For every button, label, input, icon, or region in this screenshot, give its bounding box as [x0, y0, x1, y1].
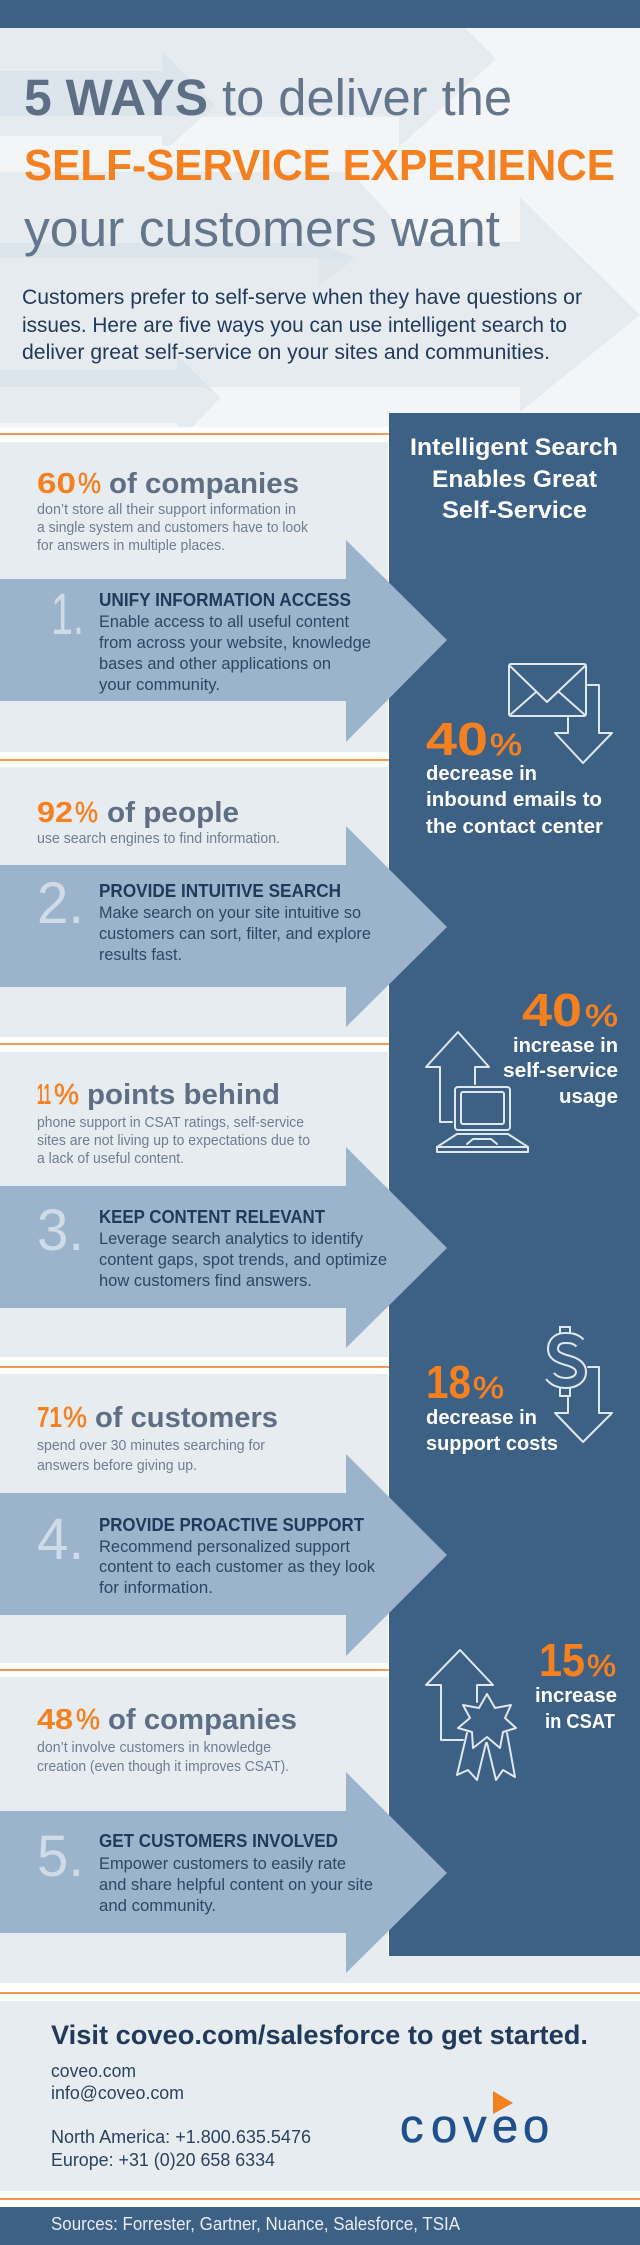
stat heading: %: [78, 468, 101, 500]
stat: 40% increase in self-service usage: [503, 984, 618, 1108]
icon: envelope with down arrow: [509, 664, 612, 763]
step text: how customers find answers.: [99, 1272, 312, 1290]
step text: your community.: [99, 676, 220, 694]
step title: UNIFY INFORMATION ACCESS: [99, 590, 351, 610]
stat detail: use search engines to find information.: [37, 831, 280, 847]
contact details: Europe: +31 (0)20 658 6334: [51, 2150, 275, 2170]
stat heading: 92: [37, 797, 73, 829]
stat heading: %: [75, 797, 98, 829]
stat heading: 11: [37, 1079, 51, 1111]
stat: 40% decrease in inbound emails: %: [490, 727, 522, 762]
logo: coveo: coveo: [400, 2099, 549, 2152]
contact details: North America: +1.800.635.5476: [51, 2127, 311, 2147]
stat: 40% decrease in inbound emails: inbound emails to: [426, 789, 602, 811]
step title: GET CUSTOMERS INVOLVED: [99, 1831, 338, 1851]
number: 2.: [37, 871, 84, 936]
step text: and share helpful content on your site: [99, 1876, 373, 1894]
way 5: [0, 1704, 447, 1973]
stat heading: %: [54, 1079, 79, 1111]
title: to deliver the: [222, 69, 512, 126]
stat heading: of companies: [109, 468, 299, 500]
step text: [99, 1538, 376, 1597]
stat: 15% increase in CSAT: increase: [535, 1685, 617, 1707]
step text: and community.: [99, 1897, 216, 1915]
arrow: [0, 1772, 447, 1973]
stat detail: [37, 502, 309, 554]
stat heading: 60: [37, 468, 76, 500]
number: 5.: [37, 1824, 84, 1889]
step text: Enable access to all useful content: [99, 613, 349, 631]
stat detail: a single system and customers have to look: [37, 520, 309, 536]
stat: 40% increase in self-service usage: self-service: [503, 1060, 618, 1082]
stat heading: %: [63, 1402, 87, 1434]
step text: content gaps, spot trends, and optimize: [99, 1251, 387, 1269]
stat: 40% increase in self-service usage: %: [585, 998, 618, 1033]
intro paragraph: Customers prefer to self-serve when they have questions or: [22, 286, 582, 309]
step text: [99, 613, 371, 694]
intro paragraph: [22, 286, 582, 364]
stat detail: don’t store all their support information in: [37, 502, 296, 518]
stat detail: don’t involve customers in knowledge: [37, 1740, 271, 1756]
top banner bar: [0, 0, 640, 28]
number: 1.: [51, 582, 84, 647]
number: 3.: [37, 1198, 84, 1263]
stat: 18% decrease in support costs: %: [473, 1370, 504, 1405]
stat heading: [37, 797, 239, 829]
sources bar: [0, 2207, 640, 2245]
step text: [99, 1230, 387, 1290]
stat: 15% increase in CSAT: %: [587, 1648, 616, 1683]
stat: 15% increase in CSAT: [535, 1634, 617, 1733]
column heading: [410, 434, 618, 524]
step text: Empower customers to easily rate: [99, 1855, 346, 1873]
step text: results fast.: [99, 946, 182, 964]
step text: [99, 1855, 373, 1915]
contact details: coveo.com: [51, 2061, 136, 2081]
call to action heading: Visit coveo.com/salesforce to get started.: [51, 2020, 588, 2050]
icon: dollar sign with down arrow: [550, 1327, 612, 1442]
stat: 18% decrease in support costs: decrease in: [426, 1407, 537, 1429]
stat detail: a lack of useful content.: [37, 1151, 184, 1167]
way 4: [0, 1402, 447, 1656]
stat: 40% increase in self-service usage: usage: [559, 1086, 618, 1108]
stat heading: of companies: [108, 1704, 297, 1736]
step text: [99, 904, 371, 964]
step title: KEEP CONTENT RELEVANT: [99, 1207, 325, 1227]
title: [24, 69, 615, 257]
stat heading: 48: [37, 1704, 73, 1736]
step text: from across your website, knowledge: [99, 634, 371, 652]
way 3: [0, 1079, 447, 1348]
column heading: Intelligent Search: [410, 434, 618, 461]
step text: content to each customer as they look: [99, 1558, 376, 1576]
stat: 18% decrease in support costs: support costs: [426, 1433, 558, 1455]
step text: bases and other applications on: [99, 655, 331, 673]
column heading: Self-Service: [442, 497, 587, 524]
stat detail: answers before giving up.: [37, 1458, 197, 1474]
stat heading: points behind: [87, 1079, 280, 1111]
stat: 40% decrease in inbound emails: [426, 713, 603, 838]
stat heading: %: [76, 1704, 100, 1736]
stat: 15% increase in CSAT: in CSAT: [545, 1711, 615, 1733]
title: 5 WAYS: [24, 69, 208, 126]
panel: intelligent search results column: [389, 413, 640, 1956]
arrow: [0, 540, 447, 742]
contact details: [51, 2061, 311, 2170]
stat: 40% increase in self-service usage: 40: [522, 984, 582, 1036]
panel: header with background arrows: [0, 28, 640, 427]
stat detail: [37, 1438, 265, 1474]
step text: Make search on your site intuitive so: [99, 904, 361, 922]
stat detail: creation (even though it improves CSAT).: [37, 1759, 289, 1775]
stat: 18% decrease in support costs: 18: [426, 1356, 471, 1408]
number: 4.: [37, 1507, 84, 1572]
arrow: [0, 826, 447, 1027]
step text: for information.: [99, 1579, 213, 1597]
column heading: Enables Great: [432, 466, 597, 493]
stat detail: for answers in multiple places.: [37, 538, 225, 554]
icon: laptop with up arrow: [426, 1032, 528, 1152]
stat detail: spend over 30 minutes searching for: [37, 1438, 265, 1454]
way 2: [0, 797, 447, 1027]
step title: PROVIDE INTUITIVE SEARCH: [99, 881, 341, 901]
intro paragraph: deliver great self-service on your sites and communities.: [22, 341, 550, 364]
stat: 15% increase in CSAT: 15: [539, 1634, 585, 1686]
step text: customers can sort, filter, and explore: [99, 925, 371, 943]
sources bar: Sources: Forrester, Gartner, Nuance, Salesforce, TSIA: [51, 2213, 461, 2234]
panel: call to action footer: [0, 2001, 640, 2191]
stat: 40% decrease in inbound emails: the contact center: [426, 816, 603, 838]
stat heading: 71: [37, 1402, 62, 1434]
arrow: [0, 1147, 447, 1348]
step text: Leverage search analytics to identify: [99, 1230, 364, 1248]
step title: PROVIDE PROACTIVE SUPPORT: [99, 1515, 364, 1535]
stat: 40% increase in self-service usage: increase in: [513, 1035, 618, 1057]
stat heading: of people: [107, 797, 239, 829]
section background panels: [0, 442, 640, 1983]
title: SELF-SERVICE EXPERIENCE: [24, 141, 615, 190]
stat: 40% decrease in inbound emails: decrease in: [426, 763, 537, 785]
stat detail: sites are not living up to expectations due to: [37, 1133, 310, 1149]
title: your customers want: [24, 200, 500, 257]
contact details: info@coveo.com: [51, 2083, 184, 2103]
stat: 18% decrease in support costs: [426, 1356, 558, 1455]
stat detail: [37, 1740, 289, 1775]
way 1: [0, 468, 447, 742]
intro paragraph: issues. Here are five ways you can use intelligent search to: [22, 314, 567, 337]
stat detail: phone support in CSAT ratings, self-service: [37, 1115, 304, 1131]
arrow: [0, 1454, 447, 1656]
stat: 40% decrease in inbound emails: 40: [426, 713, 488, 765]
stat heading: of customers: [95, 1402, 278, 1434]
icon: award ribbon with up arrow: [426, 1650, 516, 1780]
stat detail: [37, 1115, 310, 1167]
step text: Recommend personalized support: [99, 1538, 350, 1556]
